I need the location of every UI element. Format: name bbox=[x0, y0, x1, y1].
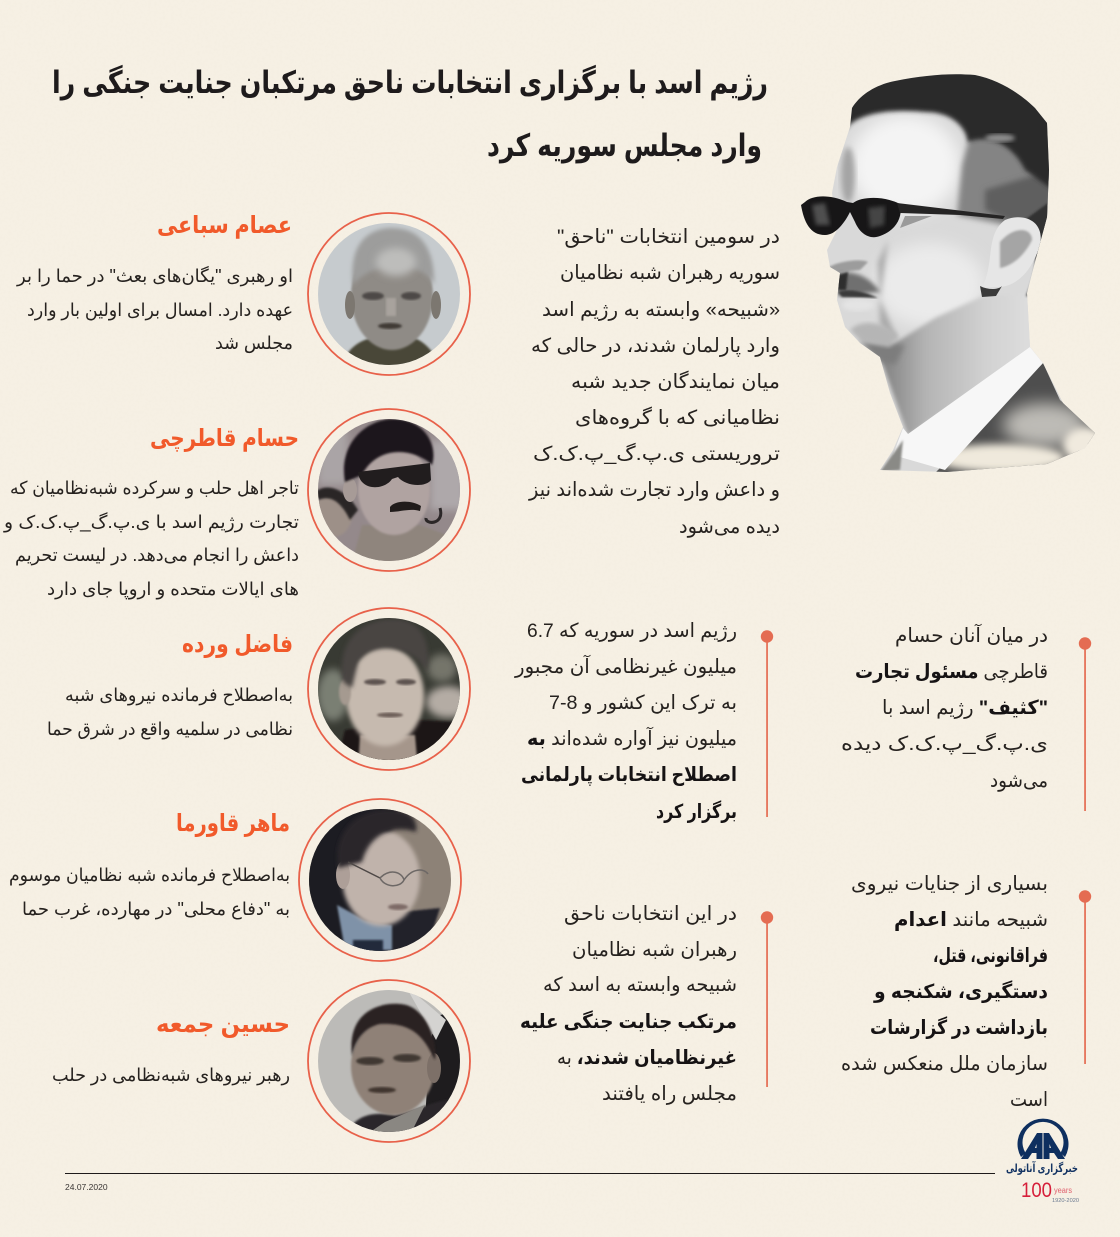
description: نظامی در سلمیه واقع در شرق حما bbox=[47, 719, 293, 740]
intro paragraph bbox=[528, 226, 780, 538]
logo: Anadolu Agency 100 years: years bbox=[1054, 1186, 1072, 1195]
intro paragraph: میان نمایندگان جدید شبه bbox=[571, 370, 780, 393]
callout: parliament elections: به ترک این کشور و 8-7 bbox=[549, 692, 737, 714]
footer rule bbox=[65, 1173, 995, 1174]
description: رهبر نیروهای شبه‌نظامی در حلب bbox=[52, 1065, 290, 1086]
intro paragraph: نظامیانی که با گروه‌های bbox=[575, 406, 780, 429]
panel: Hossam Qaterji bbox=[3, 409, 470, 600]
callout: dirty trade: قاطرچی مسئول تجارت bbox=[855, 661, 1048, 683]
description: عهده دارد. امسال برای اولین بار وارد bbox=[27, 300, 293, 321]
intro paragraph: سوریه رهبران شبه نظامیان bbox=[560, 262, 780, 284]
callout: crimes of Shabiha: بسیاری از جنایات نیروی bbox=[851, 873, 1048, 895]
date: 24.07.2020 bbox=[65, 1182, 108, 1192]
logo: Anadolu Agency 100 years: 1920-2020 bbox=[1052, 1198, 1079, 1204]
callout: crimes of Shabiha: دستگیری، شکنجه و bbox=[873, 980, 1048, 1003]
callout: war criminals entered parliament: شبیحه وابسته به اسد که bbox=[543, 974, 737, 996]
logo: Anadolu Agency 100 years: 100 bbox=[1021, 1179, 1052, 1202]
intro paragraph: وارد پارلمان شدند، در حالی که bbox=[531, 335, 780, 357]
intro paragraph: تروریستی ی.پ.گ_پ.ک.ک bbox=[533, 442, 780, 465]
description bbox=[3, 478, 299, 600]
description: به‌اصطلاح فرمانده نیروهای شبه bbox=[65, 685, 293, 706]
portrait photo bbox=[308, 213, 470, 375]
callout: parliament elections: میلیون نیز آواره شده‌اند به bbox=[527, 726, 737, 750]
portrait: main figure in profile with sunglasses bbox=[801, 62, 1110, 480]
name: حسام قاطرچی bbox=[150, 425, 299, 452]
name: حسین جمعه bbox=[156, 1011, 290, 1038]
intro paragraph: در سومین انتخابات "ناحق" bbox=[557, 226, 780, 248]
callout: dirty trade: "کثیف" رژیم اسد با bbox=[882, 697, 1048, 719]
callout: crimes of Shabiha: فراقانونی، قتل، bbox=[933, 945, 1048, 967]
callout: war criminals entered parliament: مجلس راه یافتند bbox=[602, 1083, 737, 1105]
name: فاضل ورده bbox=[182, 631, 293, 658]
panel: Maher Qavarma bbox=[9, 799, 461, 961]
portrait photo bbox=[299, 799, 461, 961]
callout: parliament elections: برگزار کرد bbox=[656, 800, 737, 823]
description: های ایالات متحده و اروپا جای دارد bbox=[47, 579, 299, 600]
callout: parliament elections: رژیم اسد در سوریه که 6.7 bbox=[527, 620, 737, 642]
description: به "دفاع محلی" در مهارده، غرب حما bbox=[22, 899, 290, 920]
panel: Esam Sabaei bbox=[16, 212, 470, 375]
title bbox=[52, 64, 768, 164]
panel: Hossein Joma bbox=[52, 980, 470, 1142]
name: عصام سباعی bbox=[157, 212, 292, 239]
intro paragraph: «شبیحه» وابسته به رژیم اسد bbox=[542, 299, 780, 321]
callout: war criminals entered parliament: در این انتخابات ناحق bbox=[564, 903, 737, 925]
portrait photo bbox=[308, 409, 470, 571]
description bbox=[47, 685, 293, 740]
name: ماهر قاورما bbox=[176, 810, 290, 837]
description: داعش را انجام می‌دهد. در لیست تحریم bbox=[15, 545, 299, 566]
callout: war criminals entered parliament: مرتکب جنایت جنگی علیه bbox=[520, 1010, 737, 1033]
callout: crimes of Shabiha: شبیحه مانند اعدام bbox=[894, 909, 1048, 931]
description: تاجر اهل حلب و سرکرده شبه‌نظامیان که bbox=[10, 478, 299, 499]
callout: war criminals entered parliament: رهبران شبه نظامیان bbox=[572, 939, 737, 961]
callout: war criminals entered parliament: غیرنظامیان شدند، به bbox=[557, 1047, 737, 1069]
callout: dirty trade: در میان آنان حسام bbox=[895, 623, 1048, 647]
portrait photo bbox=[308, 608, 470, 770]
callout: crimes of Shabiha: بازداشت در گزارشات bbox=[870, 1016, 1048, 1039]
callout: parliament elections: اصطلاح انتخابات پارلمانی bbox=[521, 764, 737, 786]
callout: war criminals entered parliament bbox=[520, 903, 773, 1105]
description bbox=[9, 865, 290, 920]
callout: crimes of Shabiha: سازمان ملل منعکس شده bbox=[841, 1053, 1048, 1075]
panel: Fazel Verde bbox=[47, 608, 470, 770]
intro paragraph: دیده می‌شود bbox=[679, 516, 780, 538]
callout: parliament elections bbox=[514, 620, 773, 823]
callout: dirty trade: ی.پ.گ_پ.ک.ک دیده bbox=[841, 732, 1048, 755]
description bbox=[16, 265, 293, 353]
portrait photo bbox=[308, 980, 470, 1142]
title: وارد مجلس سوریه کرد bbox=[487, 128, 762, 164]
intro paragraph: و داعش وارد تجارت شده‌اند نیز bbox=[528, 479, 780, 501]
title: رژیم اسد با برگزاری انتخابات ناحق مرتکبان جنایت جنگی را bbox=[52, 64, 768, 101]
description: مجلس شد bbox=[215, 333, 293, 353]
description: تجارت رژیم اسد با ی.پ.گ_پ.ک.ک و bbox=[3, 512, 299, 533]
callout: dirty trade bbox=[841, 623, 1091, 811]
callout: dirty trade: می‌شود bbox=[990, 770, 1048, 792]
description: او رهبری "یگان‌های بعث" در حما را بر bbox=[16, 265, 293, 287]
callout: crimes of Shabiha bbox=[841, 873, 1091, 1111]
logo: Anadolu Agency 100 years: خبرگزاری آناتولی bbox=[1006, 1161, 1078, 1176]
callout: crimes of Shabiha: است bbox=[1010, 1089, 1048, 1111]
callout: parliament elections: میلیون غیرنظامی آن مجبور bbox=[514, 654, 737, 678]
description: به‌اصطلاح فرمانده شبه نظامیان موسوم bbox=[9, 865, 290, 886]
logo: Anadolu Agency 100 years bbox=[1006, 1119, 1079, 1204]
